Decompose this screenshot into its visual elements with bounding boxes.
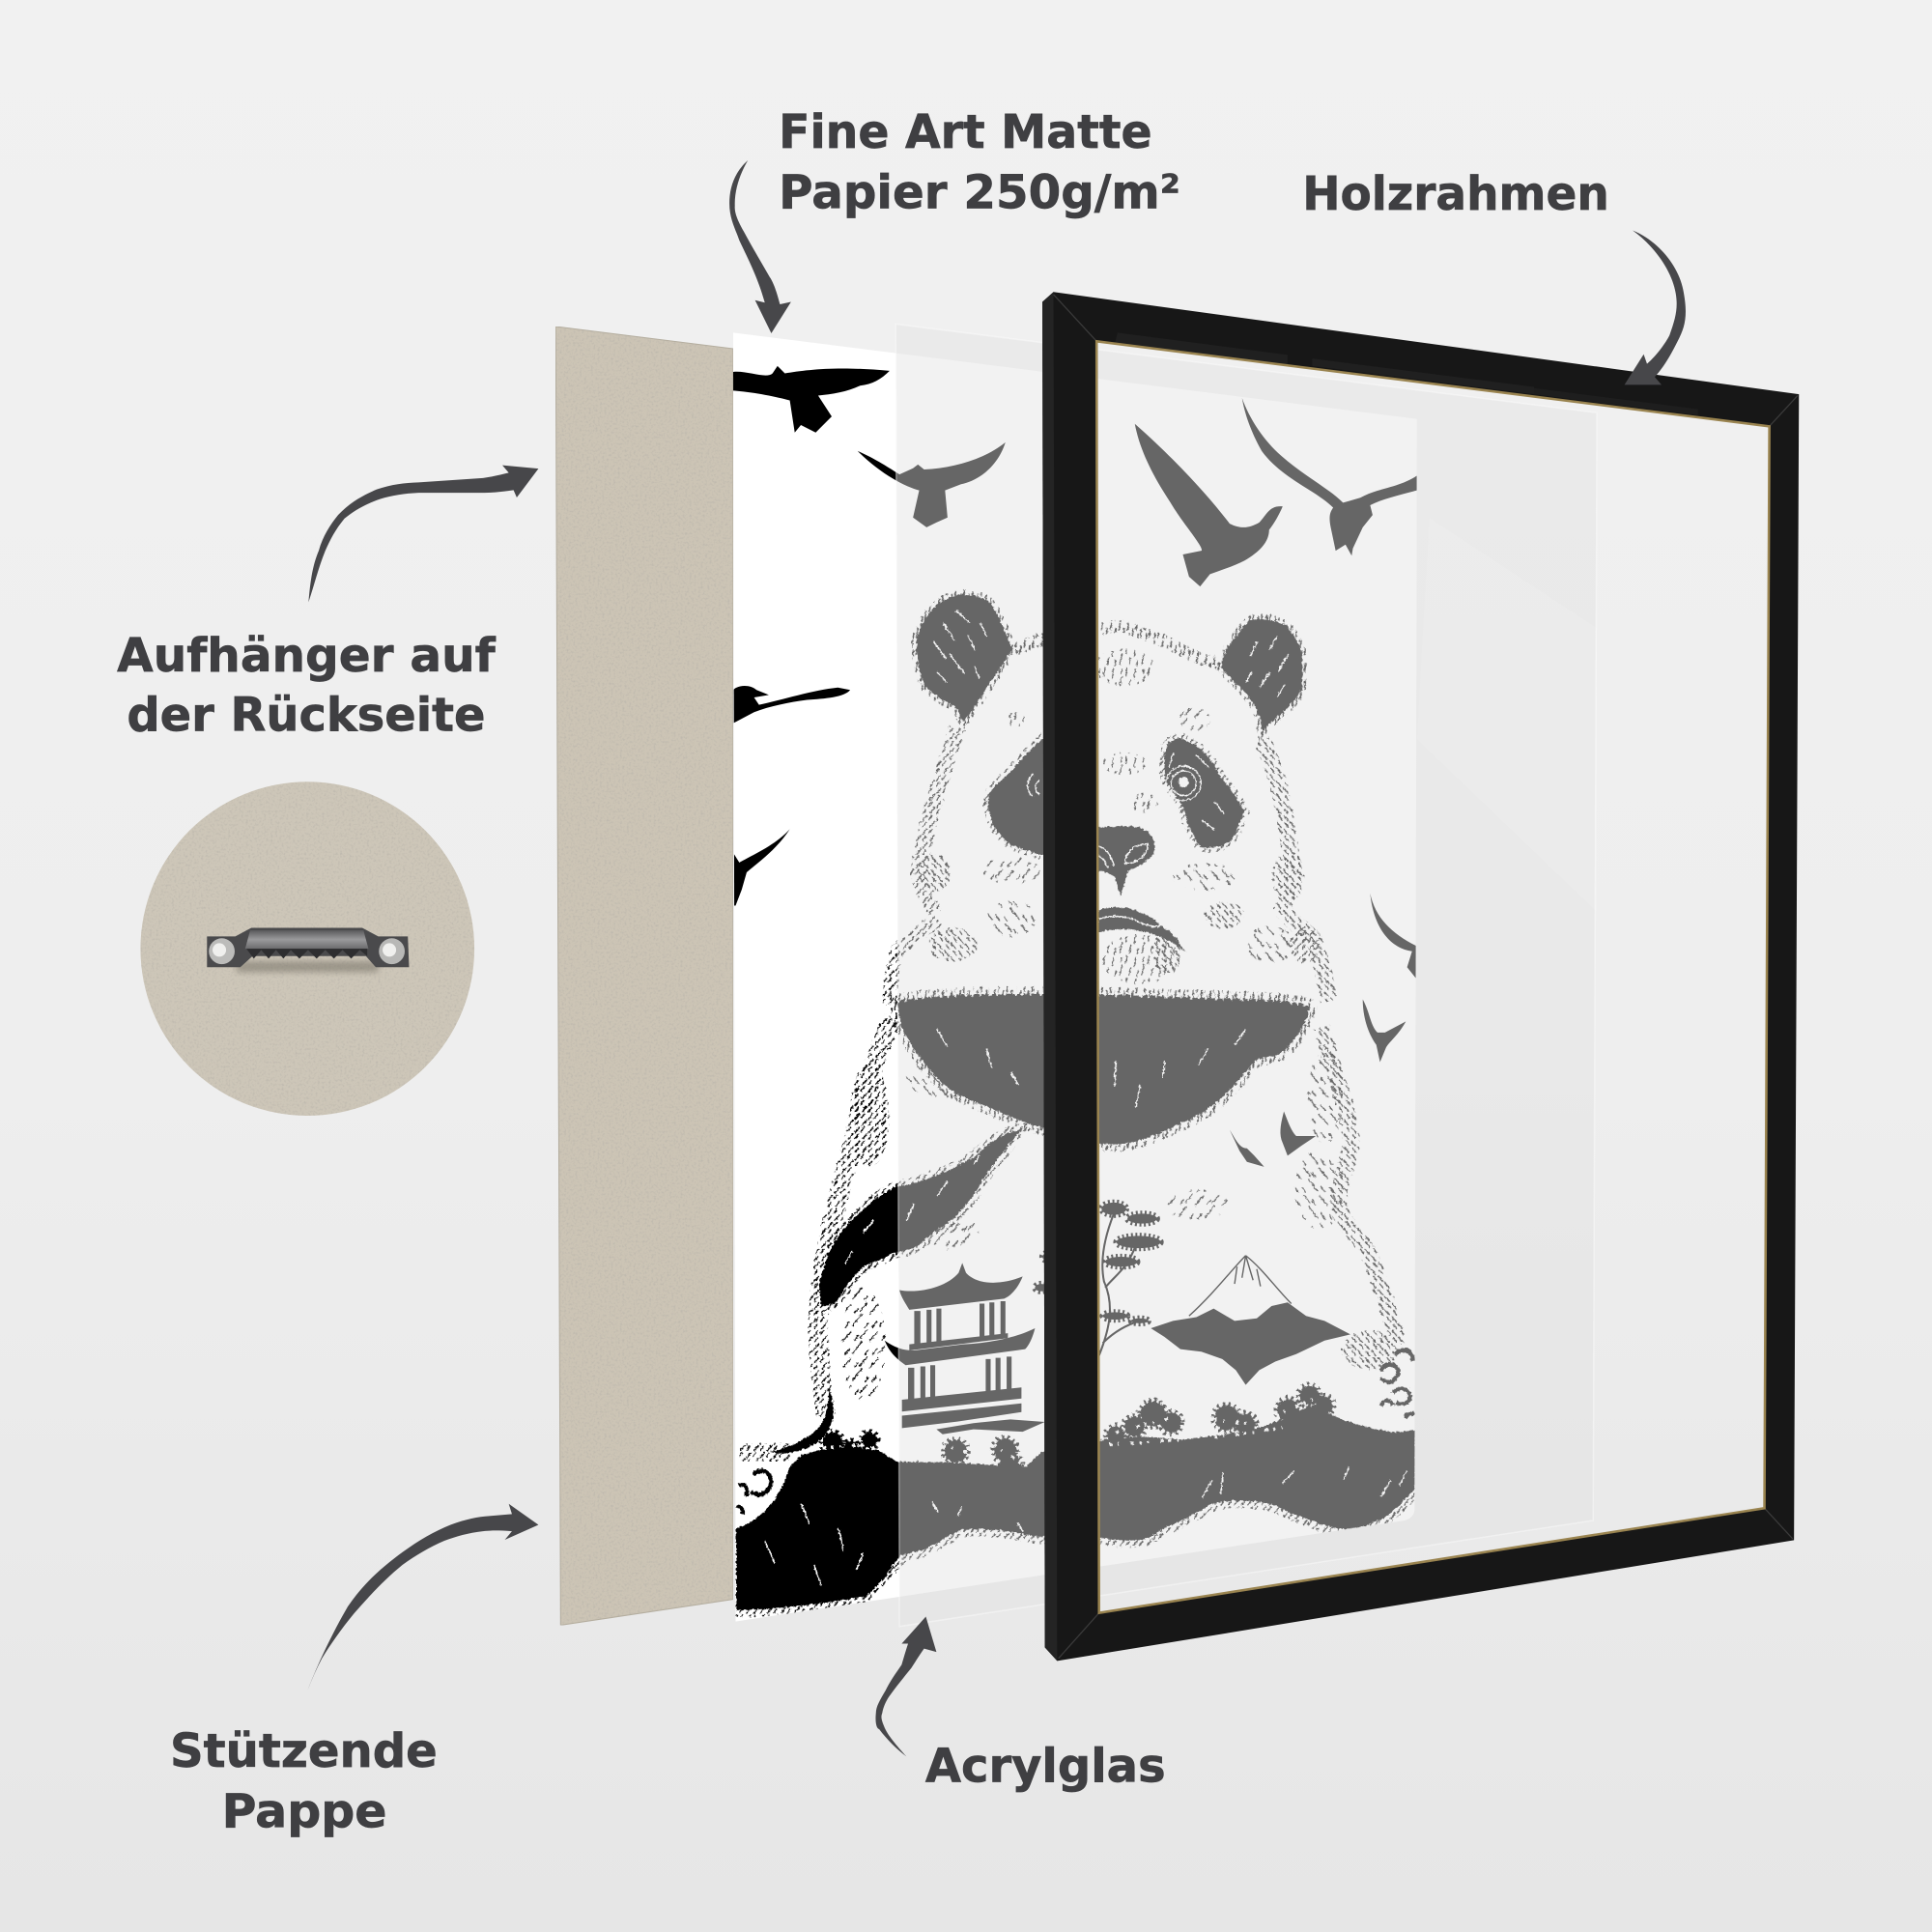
- arm highlights: [844, 1154, 979, 1263]
- label: Stützende Pappe: Pappe: [222, 1785, 387, 1839]
- panda ears: [916, 594, 1302, 730]
- panda nose: [1098, 825, 1155, 896]
- arrow: to supporting cardboard: [307, 1504, 538, 1690]
- arrow: to hanger side cardboard: [308, 466, 538, 602]
- label: Fine Art Matte Papier: Fine Art Matte: [779, 105, 1152, 159]
- panda mouth: [1097, 906, 1185, 952]
- icon: sawtooth hanger on cardboard circle: [140, 781, 474, 1116]
- panda outline fur: [817, 626, 1396, 1414]
- forest tree clumps: [822, 1385, 1332, 1474]
- lower body fur highlights: [764, 1466, 1406, 1584]
- label: Fine Art Matte Papier: Papier 250g/m²: [779, 166, 1180, 220]
- chest fur highlights: [936, 1029, 1244, 1114]
- forest and lower body: [735, 1405, 1414, 1609]
- mountain: [1151, 1256, 1350, 1385]
- arm dark fur: [818, 1128, 1021, 1306]
- panel: supporting cardboard: [555, 327, 733, 1625]
- ear highlights: [933, 610, 1288, 696]
- left paw: [735, 1452, 788, 1513]
- label: Acrylglas: Acrylglas: [925, 1739, 1166, 1793]
- forest speckle: [801, 1397, 1316, 1463]
- pagoda: [885, 1263, 1045, 1435]
- chest top fringe cut-ins: [895, 987, 1309, 999]
- label: Stützende Pappe: Stützende: [170, 1724, 438, 1778]
- panda artwork: [735, 594, 1414, 1609]
- label: Aufhänger auf der Rückseite: Aufhänger auf: [117, 629, 497, 683]
- panda eyes: [1027, 752, 1224, 836]
- lower body fur edge: [735, 1488, 1414, 1609]
- birds: [732, 366, 1417, 1167]
- arrow: to wooden frame: [1625, 231, 1686, 384]
- label: Holzrahmen: Holzrahmen: [1302, 167, 1609, 221]
- foot spike: [770, 1386, 833, 1452]
- right paw: [1380, 1350, 1414, 1417]
- arrow: to print paper: [729, 160, 791, 333]
- panel: wooden frame: [1042, 292, 1799, 1661]
- panel: fine art print: [727, 321, 1430, 1638]
- tree: [1035, 1203, 1161, 1355]
- chest band: [895, 993, 1309, 1144]
- label: Aufhänger auf der Rückseite: der Rückseite: [127, 688, 486, 742]
- panda inner fur: [840, 648, 1400, 1400]
- panel: acrylic glass: [895, 324, 1597, 1627]
- arrow: to acrylic glass: [875, 1616, 936, 1756]
- panda eye patches: [987, 734, 1243, 855]
